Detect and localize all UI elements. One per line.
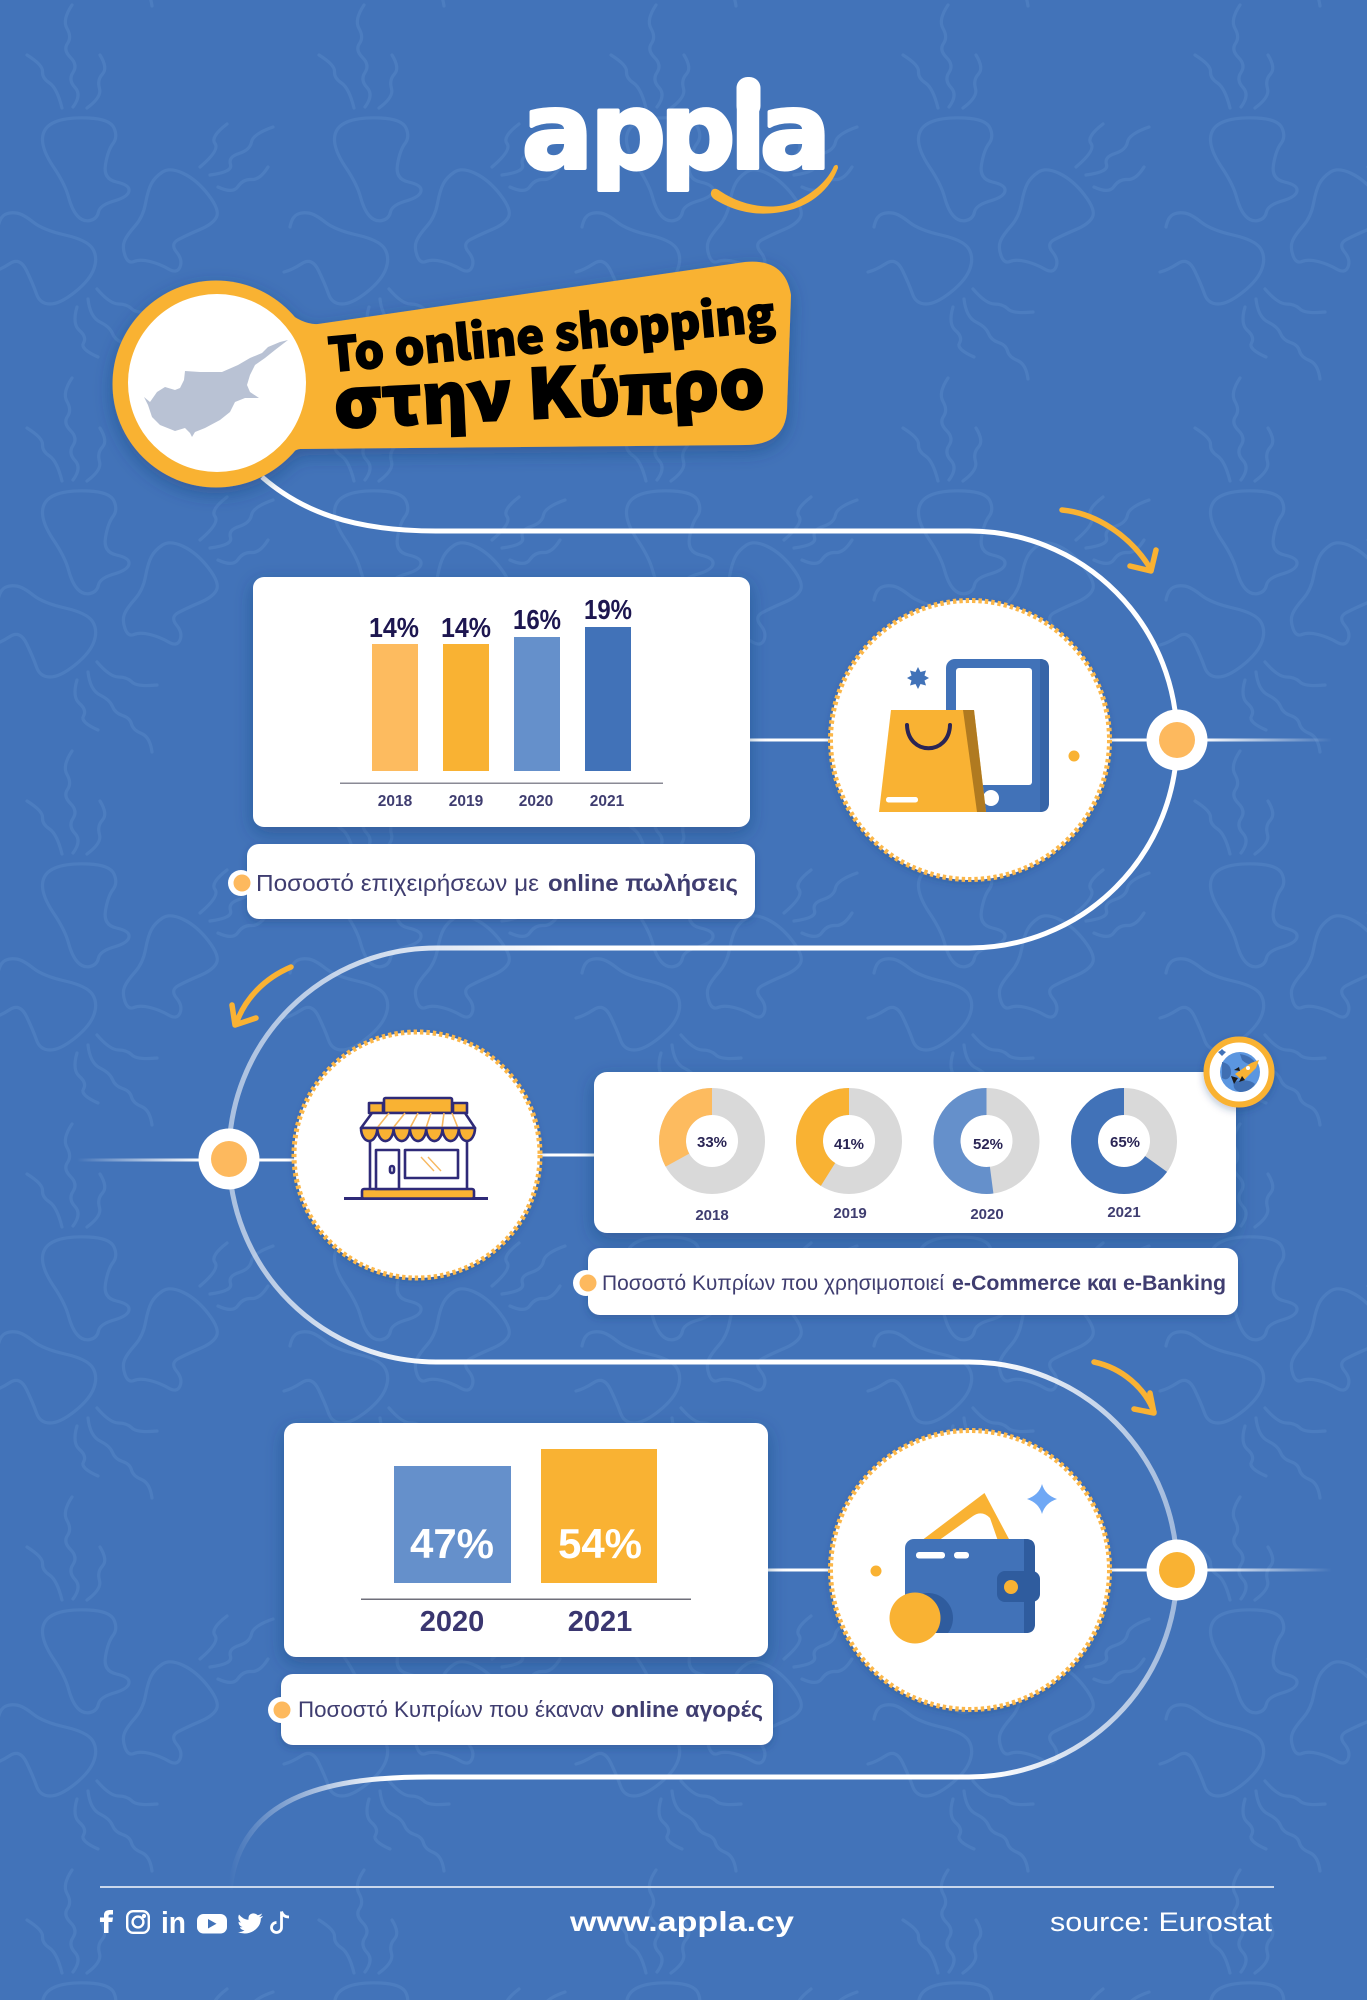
donut 2021: 2021: [1107, 1204, 1141, 1221]
icon: tiktok: [272, 1912, 289, 1932]
donut 2020: 2020: [970, 1206, 1004, 1223]
node 3: [1146, 1540, 1208, 1600]
icon: rocket badge: [1206, 1040, 1272, 1104]
bar 2018: [369, 612, 419, 810]
panel: business bar chart: [253, 577, 750, 827]
bar 2020: 47%: [410, 1520, 494, 1567]
bar 2021: 54%: [558, 1520, 642, 1567]
icon: twitter: [238, 1913, 263, 1934]
title badge: [112, 262, 791, 488]
bar 2020: 2020: [420, 1606, 484, 1638]
donut 2019: [810, 1102, 888, 1222]
donut 2021: 65%: [1110, 1134, 1140, 1151]
caption 3: Ποσοστό Κυπρίων που έκαναν: [298, 1697, 604, 1722]
website url: www.appla.cy: [569, 1906, 795, 1937]
arrow 3: [1094, 1362, 1154, 1413]
panel: online purchases bars: [284, 1423, 768, 1657]
bar 2019: [441, 612, 491, 810]
bar 2021: 19%: [584, 594, 632, 625]
arrow 2: [232, 967, 291, 1025]
bar 2019: 14%: [441, 612, 491, 643]
arrow 1: [1062, 510, 1156, 571]
panel: donut charts: [594, 1072, 1236, 1233]
donut 2018: 33%: [697, 1134, 727, 1151]
section 3 connectors: [768, 1568, 1332, 1572]
icon: facebook: [100, 1910, 113, 1933]
bar 2021: [584, 594, 632, 810]
donut 2019: 2019: [833, 1205, 867, 1222]
caption 3: online αγορές: [611, 1697, 763, 1722]
donut 2018: 2018: [695, 1207, 729, 1224]
icon: wallet: [830, 1430, 1110, 1710]
caption 3: [268, 1674, 773, 1745]
icon: linkedin: in: [161, 1905, 186, 1940]
bar 2021: [541, 1449, 657, 1638]
title banner shape: [112, 262, 791, 488]
bar 2020: 2020: [519, 793, 553, 810]
donut 2020: [947, 1102, 1026, 1223]
title text: Το online shopping: [325, 276, 777, 386]
bar 2020: 16%: [513, 604, 561, 635]
bar 2020: [513, 604, 561, 810]
donut 2020: 52%: [973, 1136, 1003, 1153]
source: source: Eurostat: [1050, 1907, 1273, 1937]
footer rule: [100, 1886, 1274, 1888]
caption 1: online πωλήσεις: [548, 870, 738, 896]
node 1: [1146, 710, 1208, 770]
cyprus map circle: [128, 294, 306, 472]
caption 2: e-Commerce και e-Banking: [952, 1271, 1226, 1295]
bar 2021: 2021: [568, 1606, 632, 1638]
bar 2018: 2018: [378, 793, 413, 810]
winding path line: [229, 477, 1177, 1890]
node 2: [198, 1128, 260, 1190]
section 2 connectors: [77, 1154, 596, 1162]
section 1 connectors: [750, 738, 1332, 742]
caption 1: Ποσοστό επιχειρήσεων με: [256, 870, 539, 896]
caption 2: Ποσοστό Κυπρίων που χρησιμοποιεί: [602, 1271, 944, 1295]
bar 2020: [394, 1466, 511, 1638]
donut 2021: [1084, 1102, 1164, 1221]
donut 2018: [672, 1102, 752, 1224]
title text: στην Κύπρο: [331, 329, 766, 448]
title text: [325, 276, 777, 448]
social icons: [100, 1905, 289, 1940]
icon: shopping bag and phone: [830, 600, 1110, 880]
logo: appla: appla: [522, 71, 831, 193]
icon: store: [294, 1032, 540, 1278]
bar 2021: 2021: [590, 793, 625, 810]
icon: instagram: [127, 1911, 149, 1933]
icon: youtube: [197, 1914, 227, 1934]
caption 2: [573, 1248, 1238, 1315]
bar 2018: 14%: [369, 612, 419, 643]
bar 2019: 2019: [449, 793, 484, 810]
donut 2019: 41%: [834, 1136, 864, 1153]
caption 1: [228, 844, 755, 919]
